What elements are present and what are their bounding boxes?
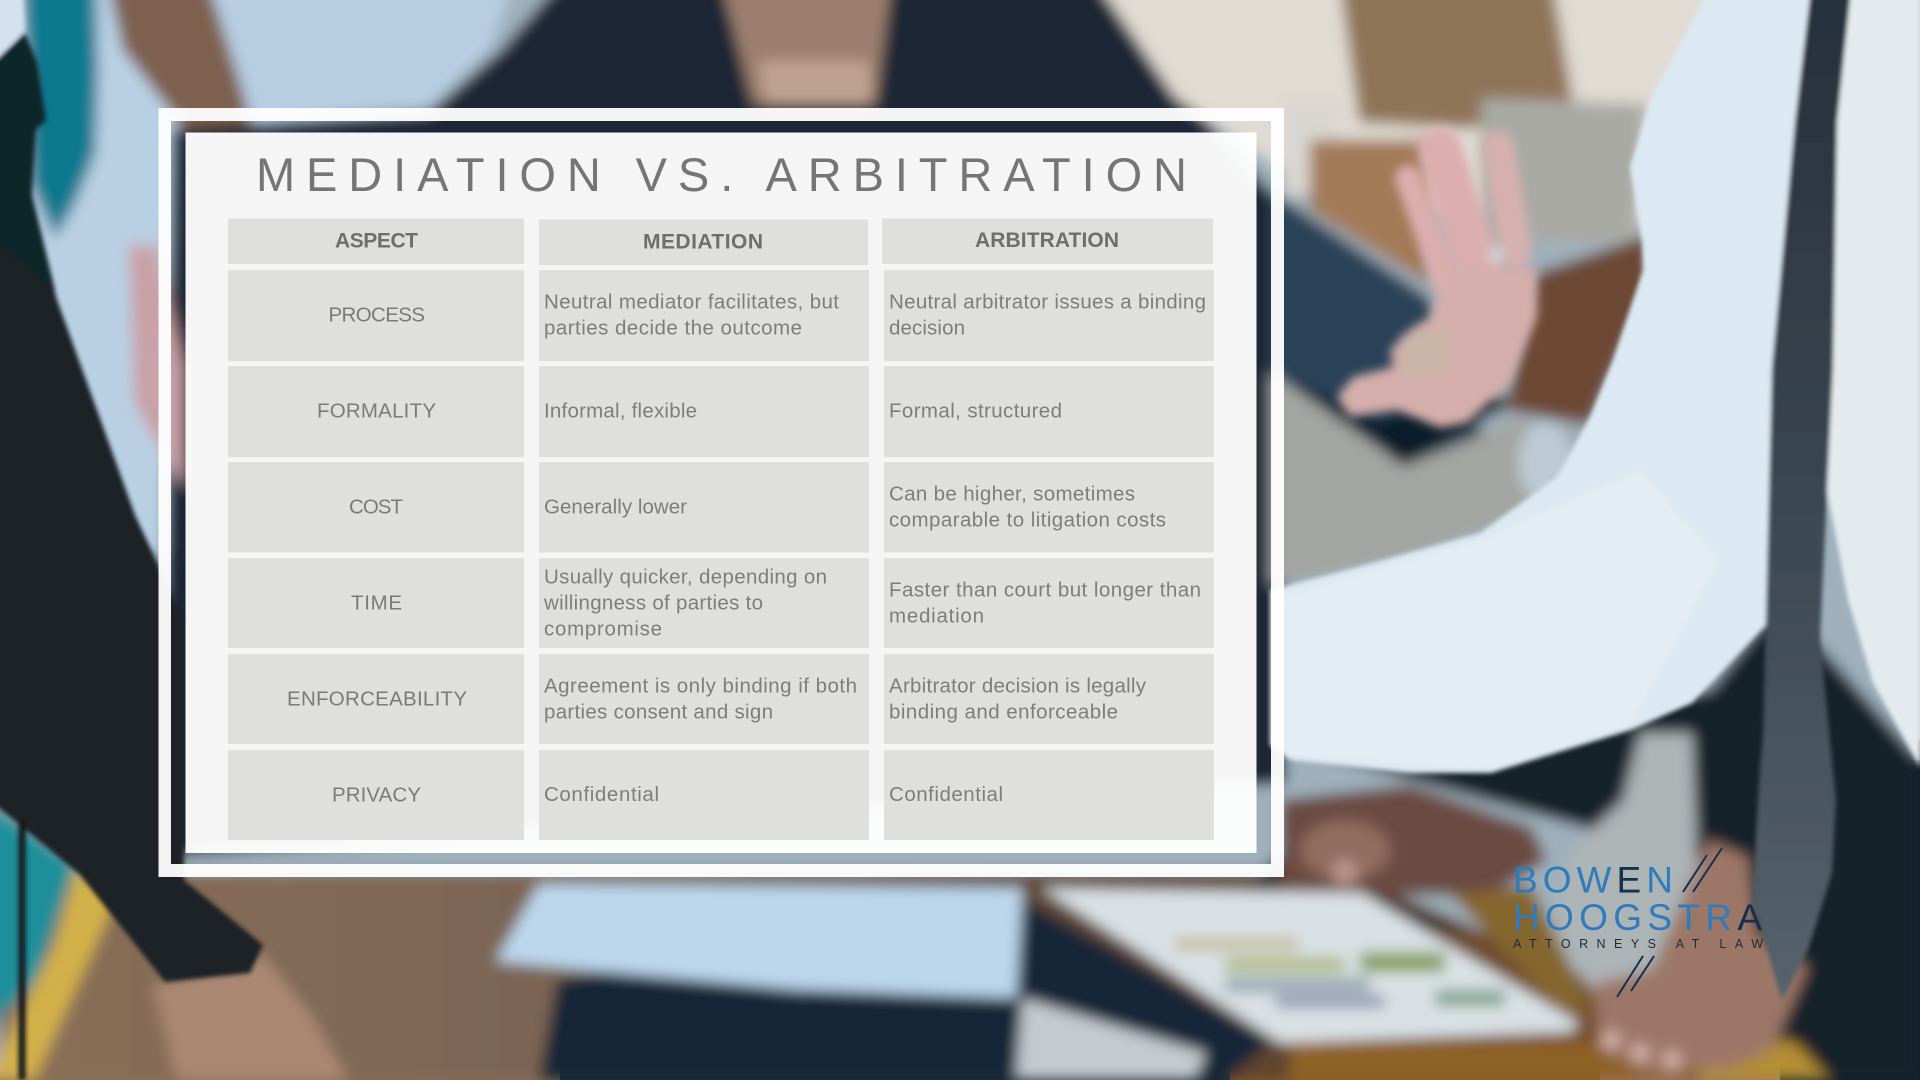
tie xyxy=(1752,0,1852,1000)
row: process xyxy=(228,270,1214,361)
header row: ASPECT xyxy=(335,230,418,252)
grey floor patch xyxy=(1547,733,1696,1000)
row: privacy xyxy=(228,750,1214,840)
row: time: mediation xyxy=(889,605,984,628)
dark area under shirt xyxy=(1270,600,1920,1080)
row: formality: Informal, flexible xyxy=(544,399,697,422)
row: cost: COST xyxy=(349,496,403,518)
strap xyxy=(18,820,26,1080)
row: process: parties decide the outcome xyxy=(544,316,802,339)
row: time: Faster than court but longer than xyxy=(889,579,1201,602)
row: enforceability: Agreement is only binding if both xyxy=(544,675,857,698)
brown arm top-left xyxy=(104,0,260,141)
right side, real coordinates xyxy=(1284,100,1340,197)
table xyxy=(0,872,1920,1080)
shirt sleeve xyxy=(1270,0,1815,773)
row: formality xyxy=(228,366,1214,457)
row: formality: FORMALITY xyxy=(317,400,436,422)
lower right hand xyxy=(1595,840,1808,1073)
panel: comparison table card xyxy=(186,132,1256,853)
row: privacy: Confidential xyxy=(889,783,1003,806)
icon: logo slashes xyxy=(1617,848,1722,997)
header row: MEDIATION xyxy=(643,230,763,254)
suit top middle xyxy=(159,0,1286,857)
header row xyxy=(228,218,1213,265)
row: process: PROCESS xyxy=(328,304,425,326)
frame: white outer border xyxy=(158,108,1284,877)
wood under logo xyxy=(1451,885,1590,1010)
title: MEDIATION VS. ARBITRATION xyxy=(256,148,1187,201)
hand xyxy=(1337,147,1537,428)
row: formality: Formal, structured xyxy=(889,399,1062,422)
row: cost: Can be higher, sometimes xyxy=(889,482,1135,505)
row: time: willingness of parties to xyxy=(543,591,763,614)
row: process: decision xyxy=(889,316,965,339)
row: privacy: Confidential xyxy=(544,783,659,806)
dark hand xyxy=(1280,785,1547,895)
row: enforceability: ENFORCEABILITY xyxy=(287,688,467,710)
row: enforceability xyxy=(228,654,1214,744)
row: enforceability: Arbitrator decision is legally xyxy=(889,675,1147,698)
row: cost: Generally lower xyxy=(544,495,687,518)
logo: Bowen Hoogstra Attorneys at Law xyxy=(1513,848,1763,997)
bottom-left hand xyxy=(153,955,349,1080)
row: process: Neutral mediator facilitates, but xyxy=(544,290,839,313)
top light area xyxy=(208,0,520,122)
paper xyxy=(1041,888,1579,1043)
row: time: Usually quicker, depending on xyxy=(544,565,827,588)
brown behind hand xyxy=(1505,235,1650,425)
row: time xyxy=(228,558,1214,648)
left-hand fingers xyxy=(129,245,184,490)
row: time: compromise xyxy=(544,617,662,640)
navy jacket xyxy=(1270,190,1490,466)
row: cost: comparable to litigation costs xyxy=(889,508,1166,531)
logo: Bowen Hoogstra Attorneys at Law: BOWEN xyxy=(1513,860,1673,901)
beige right top xyxy=(1084,0,1739,233)
row: cost xyxy=(228,462,1214,552)
logo: Bowen Hoogstra Attorneys at Law: HOOGSTRA xyxy=(1513,897,1762,938)
left teal xyxy=(22,0,98,239)
row: time: TIME xyxy=(351,592,402,614)
row: enforceability: binding and enforceable xyxy=(889,701,1118,724)
row: process: Neutral arbitrator issues a binding xyxy=(889,290,1206,313)
logo: Bowen Hoogstra Attorneys at Law: ATTORNEYS AT LAW xyxy=(1513,937,1763,951)
header row: ARBITRATION xyxy=(975,229,1119,252)
row: enforceability: parties consent and sign xyxy=(544,701,773,724)
grey below jacket xyxy=(1270,372,1575,585)
row: privacy: PRIVACY xyxy=(332,784,421,806)
left jacket xyxy=(0,160,263,982)
right shirt panel xyxy=(1825,0,1920,767)
